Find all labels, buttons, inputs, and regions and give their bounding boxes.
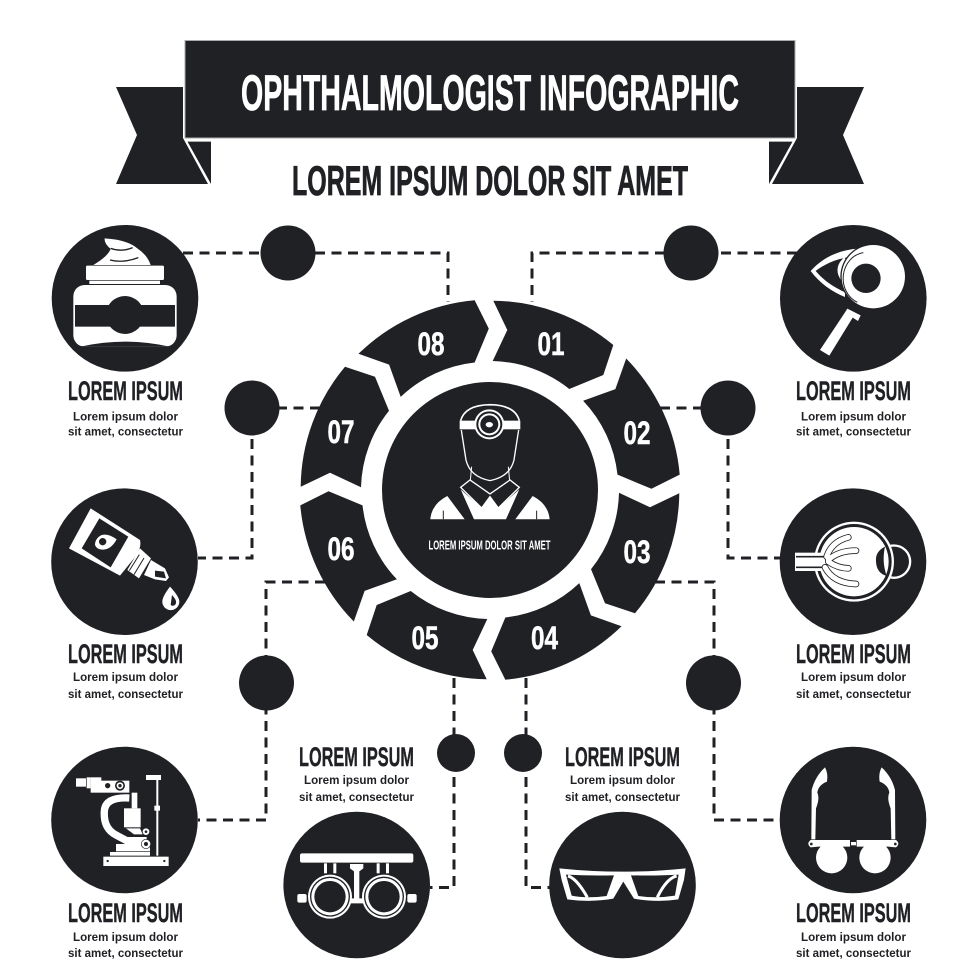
- icon circle: [780, 747, 926, 893]
- panel: cream jar: [52, 225, 198, 438]
- icon: dropper bottle: [69, 508, 179, 610]
- icon: slit lamp: [76, 775, 169, 866]
- title banner: [116, 40, 864, 184]
- text block: sit amet, consectetur: [796, 689, 912, 701]
- text block: [68, 672, 184, 701]
- heading: LOREM IPSUM: [299, 742, 414, 772]
- segment 02: [563, 358, 711, 506]
- segment 05: [367, 591, 487, 679]
- text block: [68, 412, 184, 438]
- icon circle: [780, 488, 926, 635]
- heading: LOREM IPSUM: [68, 898, 183, 928]
- segment numbers: 02: [624, 415, 650, 451]
- panel: trial frame with temples: [780, 747, 926, 960]
- segment numbers: 04: [531, 620, 558, 656]
- text block: Lorem ipsum dolor: [570, 775, 676, 787]
- dashed connectors: [183, 253, 797, 888]
- text block: sit amet, consectetur: [68, 948, 184, 960]
- text block: sit amet, consectetur: [299, 792, 415, 804]
- center caption: LOREM IPSUM DOLOR SIT AMET: [428, 538, 551, 552]
- text block: sit amet, consectetur: [68, 426, 184, 438]
- text block: [796, 932, 912, 960]
- text block: Lorem ipsum dolor: [801, 672, 907, 684]
- segment 03: [591, 493, 679, 613]
- icon: eye with magnifier: [811, 244, 906, 356]
- segment numbers: [328, 326, 650, 656]
- icon: trial lens frame: [297, 853, 417, 919]
- text block: sit amet, consectetur: [68, 689, 184, 701]
- text block: Lorem ipsum dolor: [73, 672, 179, 684]
- panel: eye anatomy: [780, 488, 926, 701]
- text block: [796, 412, 912, 438]
- subtitle: LOREM IPSUM DOLOR SIT AMET: [292, 157, 688, 204]
- segment 06: [269, 474, 417, 622]
- icon: eye anatomy: [795, 522, 911, 602]
- segment 01: [493, 301, 613, 389]
- panel: glasses: [549, 742, 696, 958]
- panel: trial lens frame: [283, 742, 430, 958]
- panel: eye drops: [51, 488, 198, 701]
- heading: LOREM IPSUM: [565, 742, 680, 772]
- panel: slit lamp: [51, 747, 198, 960]
- panel: eye and magnifier: [780, 225, 927, 438]
- icon circle: [51, 488, 198, 635]
- text block: Lorem ipsum dolor: [304, 775, 410, 787]
- segmented ring: [269, 269, 711, 711]
- segment numbers: 06: [328, 531, 354, 567]
- segment numbers: 07: [328, 414, 354, 450]
- segment numbers: 03: [624, 534, 650, 570]
- text block: Lorem ipsum dolor: [73, 412, 179, 424]
- icon: trial frame: [808, 767, 898, 873]
- icon circle: [52, 225, 198, 372]
- icon: doctor with head mirror: [430, 405, 550, 519]
- icon circle: [51, 747, 198, 893]
- icon: glasses: [559, 868, 686, 901]
- text block: sit amet, consectetur: [796, 426, 912, 438]
- center hub: [382, 382, 598, 598]
- connector nodes: [224, 226, 756, 772]
- text block: Lorem ipsum dolor: [801, 932, 907, 944]
- text block: [68, 932, 184, 960]
- icon: cream jar: [73, 238, 177, 347]
- text block: sit amet, consectetur: [796, 948, 912, 960]
- text block: Lorem ipsum dolor: [73, 932, 179, 944]
- text block: [796, 672, 912, 701]
- icon circle: [283, 812, 430, 958]
- segment numbers: 01: [538, 326, 564, 362]
- segment numbers: 05: [412, 620, 438, 656]
- heading: LOREM IPSUM: [68, 639, 183, 669]
- icon circle: [780, 225, 927, 372]
- segment 08: [358, 269, 506, 417]
- text block: Lorem ipsum dolor: [801, 412, 907, 424]
- icon circle: [549, 812, 696, 958]
- text block: [565, 775, 681, 804]
- segment numbers: 08: [418, 326, 444, 362]
- text block: [299, 775, 415, 804]
- heading: LOREM IPSUM: [68, 376, 183, 406]
- segment 07: [301, 367, 389, 487]
- segment 04: [474, 563, 622, 711]
- text block: sit amet, consectetur: [565, 792, 681, 804]
